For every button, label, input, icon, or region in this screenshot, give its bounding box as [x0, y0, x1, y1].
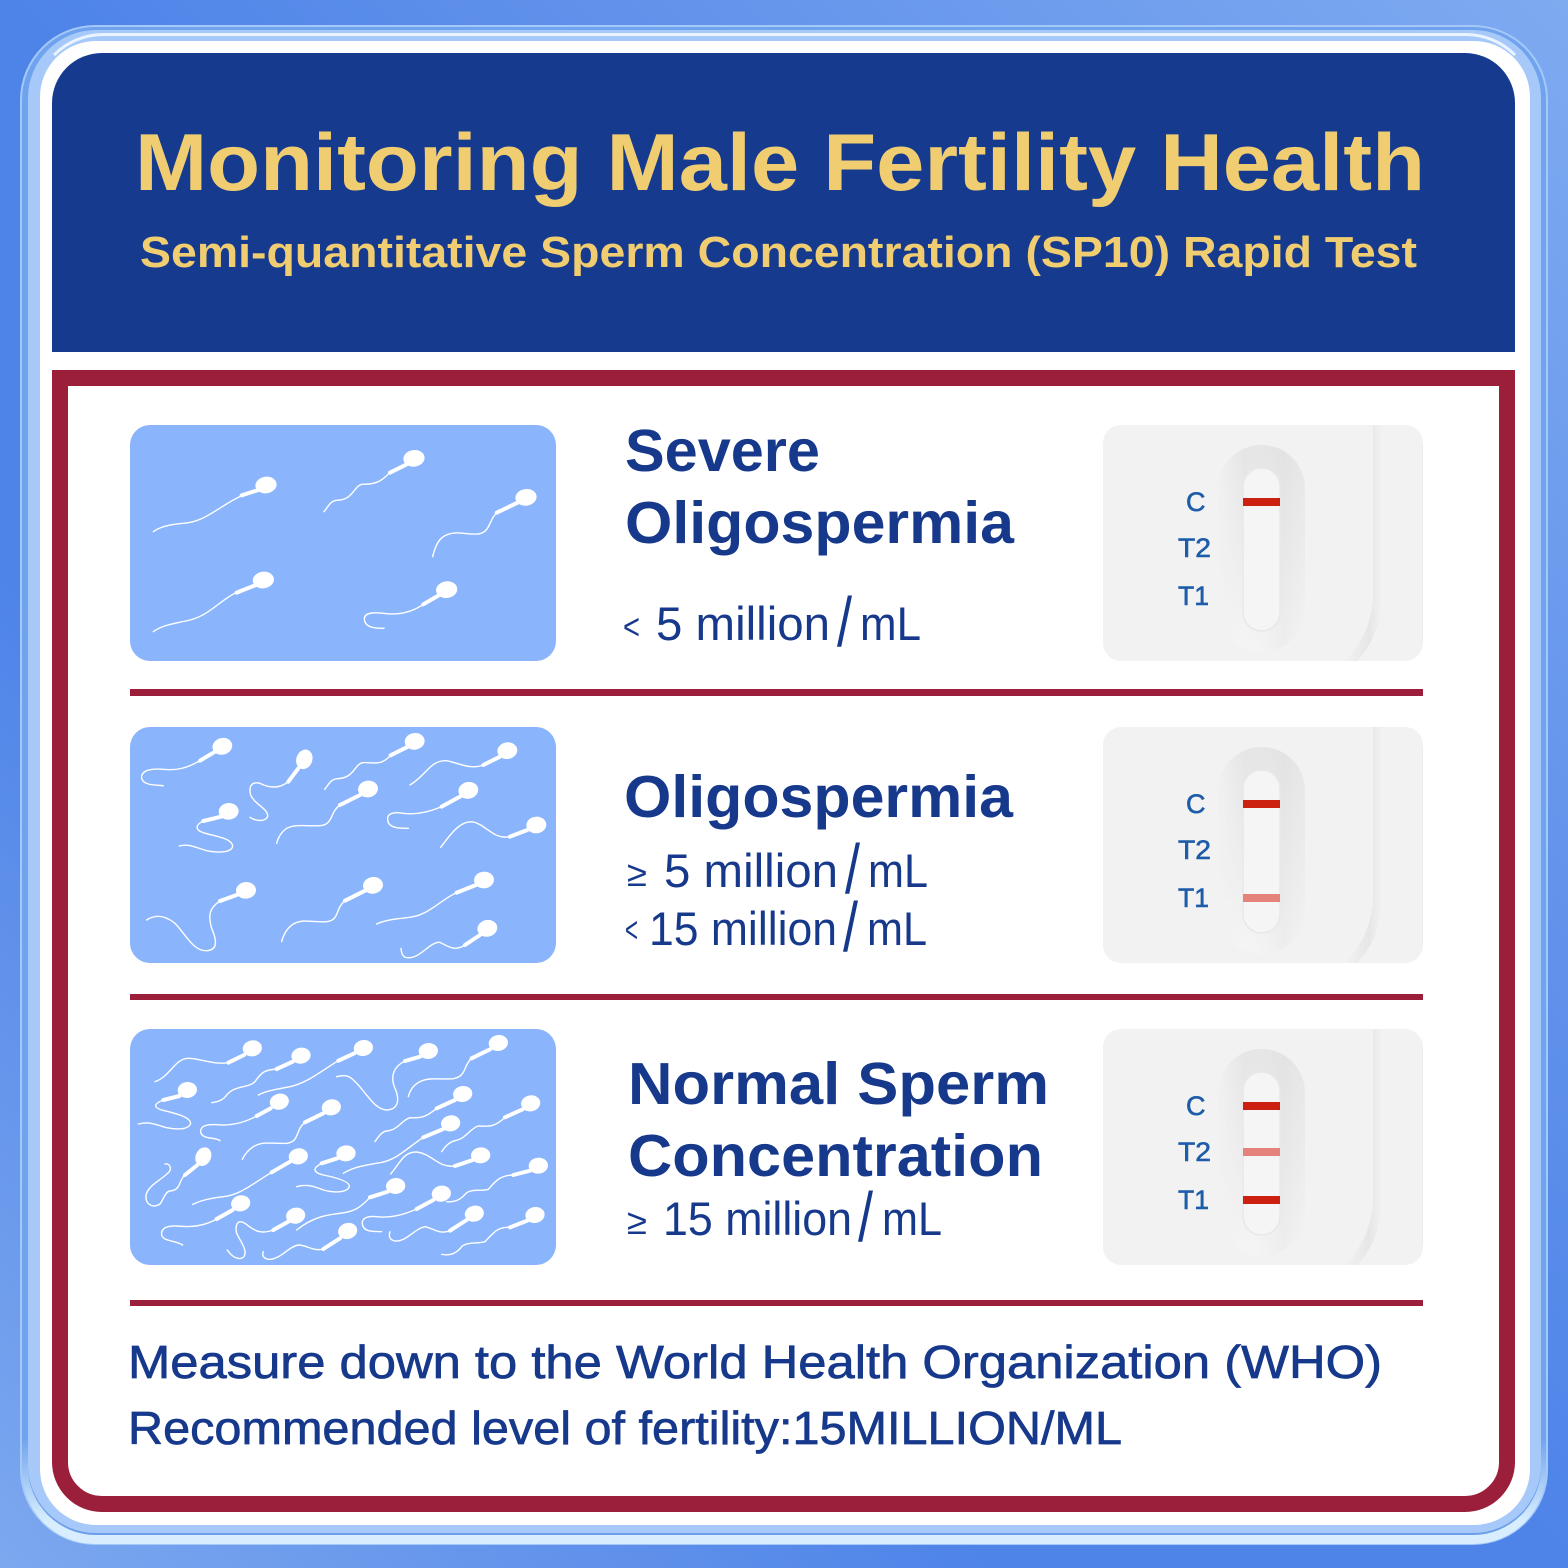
row 3 test cassette: T1	[1178, 1185, 1209, 1215]
row 2 text: oligospermia: mL	[867, 902, 927, 955]
row 3 text: normal sperm concentration: Normal Sperm	[628, 1051, 1049, 1117]
row 1 test cassette: T2	[1178, 533, 1211, 563]
row 2 text: oligospermia: Oligospermia	[624, 764, 1014, 830]
row 3 text: normal sperm concentration	[627, 1051, 1049, 1256]
row 1 sperm illustration	[130, 425, 556, 661]
row 1 text: severe oligospermia: Oligospermia	[625, 490, 1015, 556]
row 1 text: severe oligospermia	[623, 418, 1015, 661]
row 1 test cassette	[1103, 425, 1423, 661]
row 3 text: normal sperm concentration: ≥	[627, 1201, 647, 1242]
row 2 text: oligospermia: <	[625, 909, 638, 950]
row 1 test cassette: T1	[1178, 581, 1209, 611]
row 2 test cassette: T1	[1178, 883, 1209, 913]
row 2 text: oligospermia: mL	[868, 844, 928, 897]
title: Monitoring Male Fertility Health	[135, 118, 1425, 208]
row 2 text: oligospermia: 5 million	[664, 844, 838, 897]
row 1 text: severe oligospermia: /	[837, 583, 852, 661]
row 1 text: severe oligospermia: mL	[860, 597, 921, 650]
row 3 text: normal sperm concentration: /	[858, 1178, 873, 1256]
header banner	[52, 53, 1515, 352]
row 1 text: severe oligospermia: 5 million	[656, 597, 830, 650]
footer note	[128, 1336, 1382, 1454]
row 2 text: oligospermia: ≥	[627, 853, 647, 894]
divider 1	[130, 689, 1423, 696]
row 1 text: severe oligospermia: Severe	[625, 418, 820, 484]
row 2 text: oligospermia: /	[845, 830, 860, 908]
row 3 test cassette: T2	[1178, 1137, 1211, 1167]
row 3 text: normal sperm concentration: 15 million	[663, 1192, 852, 1245]
row 2 text: oligospermia	[624, 764, 1014, 966]
row 3 sperm illustration	[130, 1029, 556, 1265]
row 3 text: normal sperm concentration: Concentration	[628, 1123, 1043, 1189]
row 2 text: oligospermia: /	[843, 888, 858, 966]
divider 2	[130, 994, 1423, 1000]
row 2 sperm illustration	[130, 727, 556, 963]
row 2 text: oligospermia: 15 million	[649, 902, 837, 955]
row 3 test cassette	[1103, 1029, 1423, 1265]
subtitle: Semi-quantitative Sperm Concentration (SP10) Rapid Test	[140, 228, 1417, 277]
footer note: Recommended level of fertility:15MILLION/ML	[128, 1402, 1122, 1454]
row 2 test cassette: T2	[1178, 835, 1211, 865]
footer note: Measure down to the World Health Organization (WHO)	[128, 1336, 1382, 1388]
row 2 test cassette	[1103, 727, 1423, 963]
row 3 text: normal sperm concentration: mL	[882, 1192, 942, 1245]
row 1 test cassette: C	[1186, 487, 1206, 517]
divider 3	[130, 1300, 1423, 1306]
content frame	[60, 378, 1507, 1504]
row 2 test cassette: C	[1186, 789, 1206, 819]
row 3 test cassette: C	[1186, 1091, 1206, 1121]
row 1 text: severe oligospermia: <	[623, 606, 640, 647]
